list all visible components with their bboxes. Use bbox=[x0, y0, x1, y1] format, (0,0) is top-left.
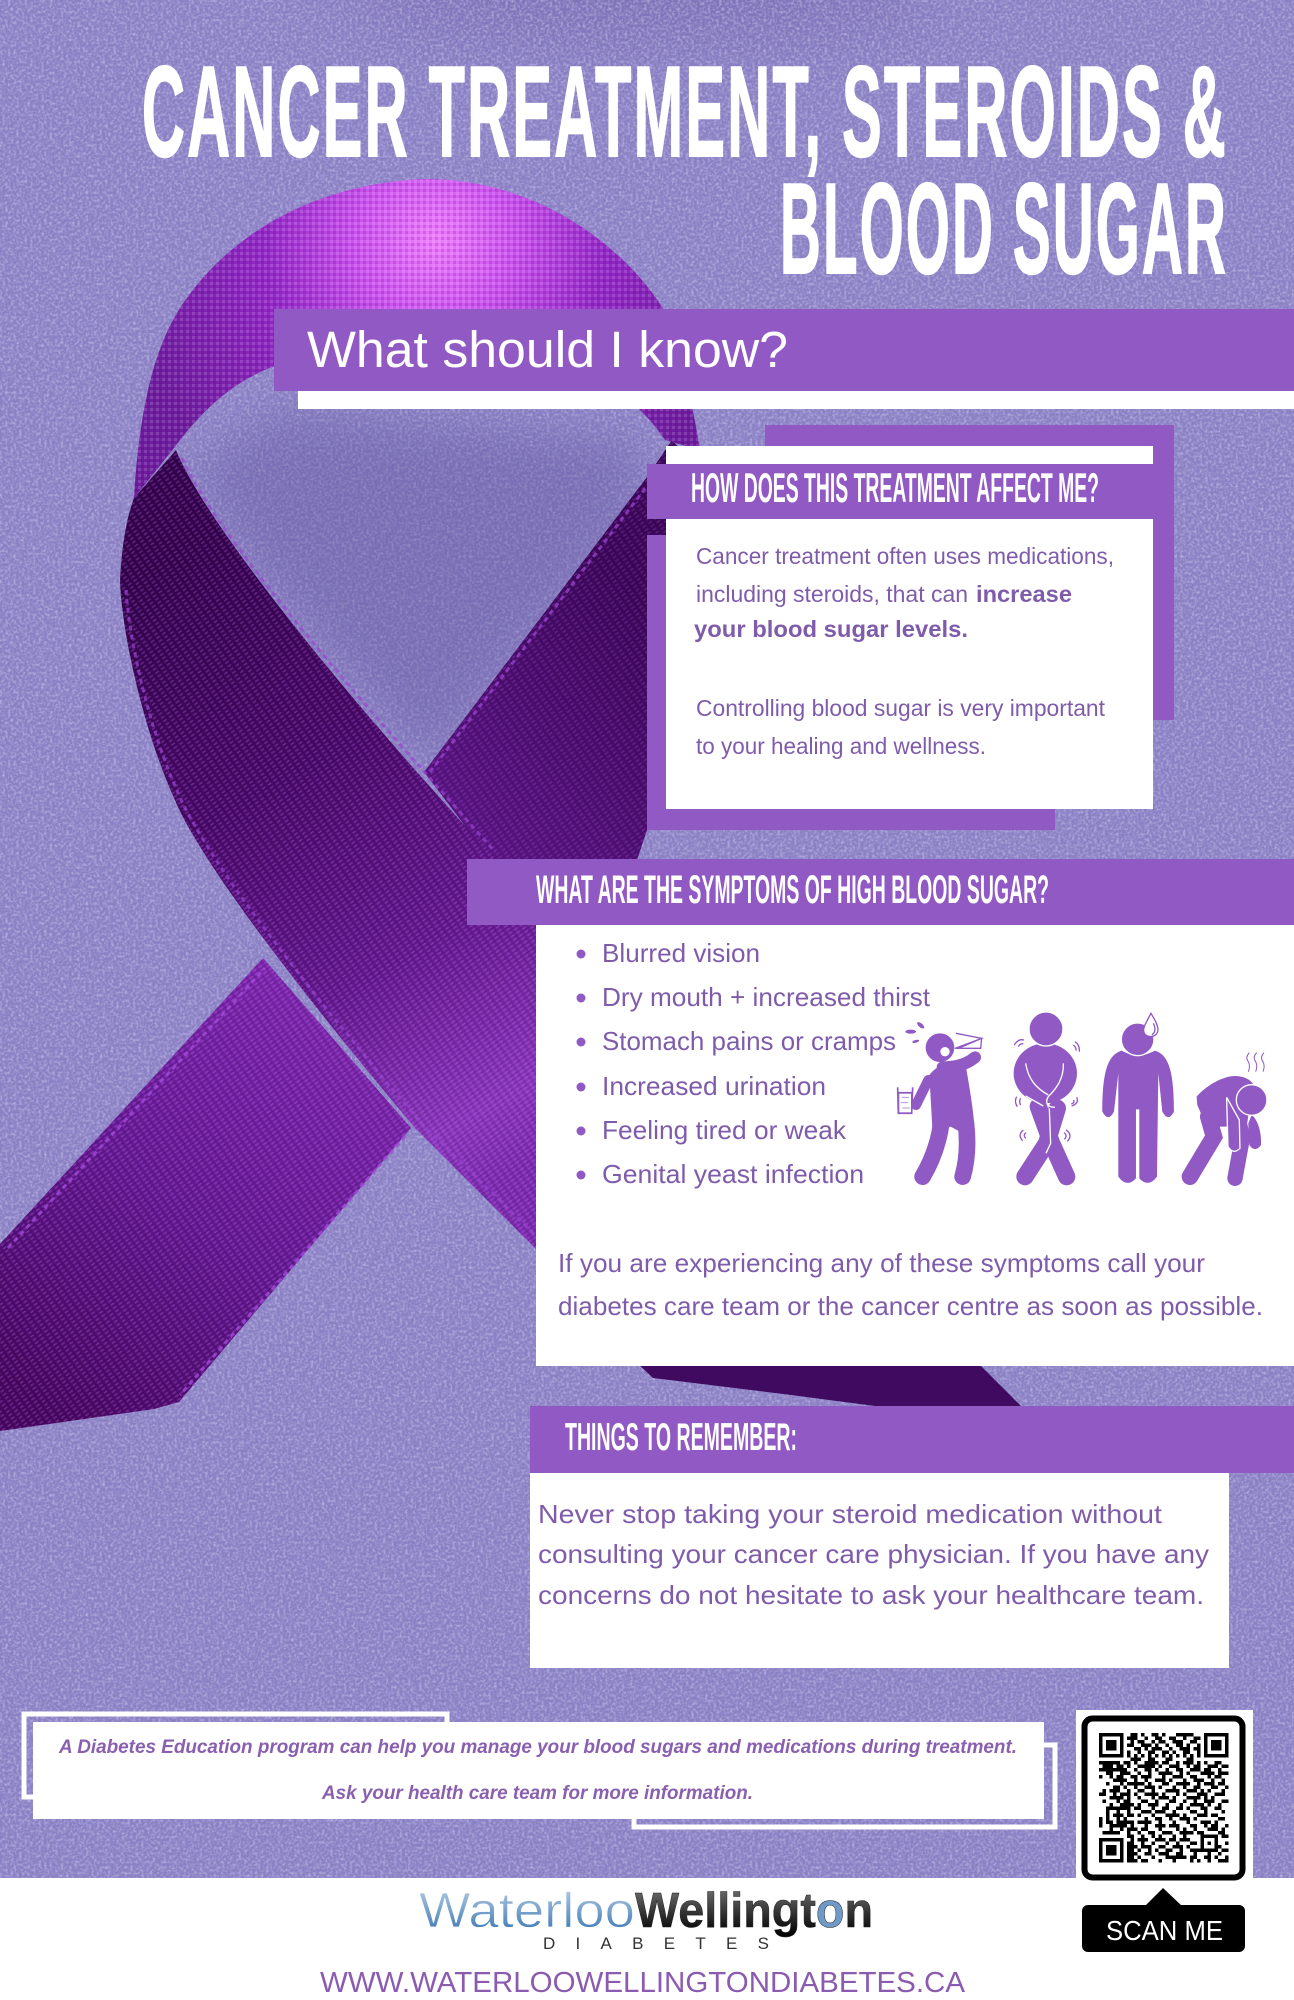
callout: diabetes education program: A Diabetes Education program can help you manage your blood sugars and medications during treatment. bbox=[58, 1737, 1017, 1758]
symptom list: Increased urination bbox=[602, 1071, 826, 1101]
symptom list: Dry mouth + increased thirst bbox=[602, 982, 931, 1012]
icon: person drinking bbox=[898, 1021, 982, 1177]
text block: treatment effect: Cancer treatment often uses medications, bbox=[696, 543, 1114, 569]
symptom list: Feeling tired or weak bbox=[602, 1115, 847, 1145]
text block: treatment effect bbox=[694, 543, 1114, 759]
heading: treatment effect bbox=[647, 464, 1153, 519]
arrow: scan me pointer bbox=[1145, 1888, 1182, 1906]
text block: treatment effect: to your healing and wellness. bbox=[696, 733, 986, 759]
logo: Waterloo Wellington Diabetes: DIABETES bbox=[543, 1934, 769, 1953]
title bbox=[142, 40, 1228, 301]
icon: figures showing symptoms bbox=[898, 1012, 1267, 1183]
banner: what should I know: What should I know? bbox=[307, 321, 788, 378]
text block: treatment effect: increase bbox=[976, 581, 1072, 607]
text block: symptoms call to action: If you are experiencing any of these symptoms call your bbox=[558, 1248, 1205, 1278]
text block: symptoms call to action bbox=[558, 1248, 1263, 1321]
text block: remember: concerns do not hesitate to ask your healthcare team. bbox=[538, 1580, 1204, 1610]
panel: symptoms of high blood sugar bbox=[467, 859, 1294, 1366]
text block: remember: consulting your cancer care physician. If you have any bbox=[538, 1539, 1209, 1569]
ribbon: top loop bbox=[134, 179, 700, 498]
symptom list: Stomach pains or cramps bbox=[602, 1026, 896, 1056]
symptom list bbox=[576, 938, 931, 1189]
text block: symptoms call to action: diabetes care team or the cancer centre as soon as possible. bbox=[558, 1291, 1263, 1321]
text block: remember: Never stop taking your steroid medication without bbox=[538, 1499, 1163, 1529]
callout: diabetes education program: Ask your health care team for more information. bbox=[321, 1783, 753, 1804]
icon: person needing to urinate bbox=[1014, 1012, 1079, 1177]
symptom list: Genital yeast infection bbox=[602, 1159, 864, 1189]
heading: things to remember bbox=[530, 1406, 1294, 1473]
ribbon: back strand upper bbox=[424, 440, 725, 860]
icon: person sweating bbox=[1102, 1013, 1174, 1183]
heading: symptoms bbox=[467, 859, 1294, 925]
panel: how does this treatment affect me bbox=[647, 425, 1174, 830]
text block: treatment effect: your blood sugar levels. bbox=[694, 616, 968, 642]
ribbon photograph bbox=[0, 179, 1021, 1431]
logo: Waterloo Wellington Diabetes bbox=[419, 1884, 873, 1953]
symptom list: Blurred vision bbox=[602, 938, 760, 968]
label: scan me: SCAN ME bbox=[1106, 1915, 1223, 1946]
text block: treatment effect: including steroids, that can bbox=[696, 581, 968, 607]
ribbon: lower-right tail bbox=[636, 1362, 1021, 1406]
text block: treatment effect: Controlling blood sugar is very important bbox=[696, 695, 1106, 721]
callout: diabetes education program bbox=[24, 1714, 1055, 1827]
footer white band bbox=[0, 1878, 1294, 2000]
text block: remember bbox=[538, 1499, 1209, 1610]
icon: person tired and bent over bbox=[1190, 1053, 1267, 1178]
panel: things to remember bbox=[530, 1406, 1294, 1668]
ribbon: front strand bbox=[120, 450, 560, 1265]
logo: Waterloo Wellington Diabetes: Waterloo bbox=[419, 1884, 635, 1938]
website url: WWW.WATERLOOWELLINGTONDIABETES.CA bbox=[320, 1967, 966, 1999]
logo: Waterloo Wellington Diabetes: Wellington bbox=[635, 1884, 873, 1938]
ribbon: lower-left tail bbox=[0, 958, 411, 1431]
QR code with scan me tag bbox=[1076, 1710, 1253, 1952]
label: scan me bbox=[1082, 1905, 1245, 1952]
heading: things to remember: THINGS TO REMEMBER: bbox=[565, 1416, 797, 1459]
banner: what should I know bbox=[274, 309, 1294, 409]
